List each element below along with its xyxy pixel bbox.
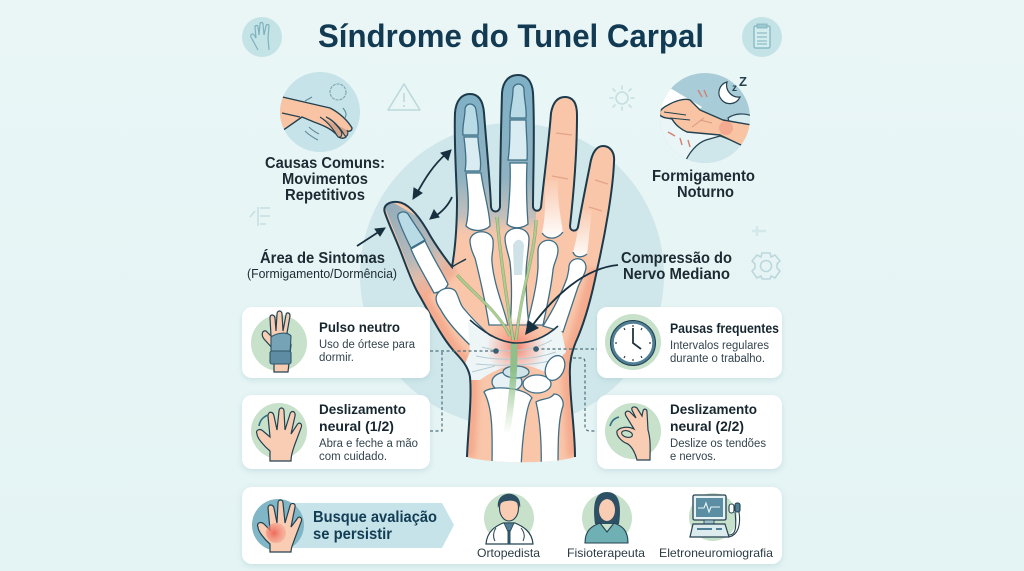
icon: hand badge [242,17,282,57]
icon: warning triangle [388,84,420,110]
text: night tingling label [652,168,755,201]
icon: faded arrows [752,226,766,236]
text: night tingling label: Noturno [677,184,734,201]
text: frequent breaks: Pausas frequentes [670,321,779,336]
icon: pinch hand [605,403,661,460]
text: neural glide 2: e nervos. [670,451,716,463]
icon: gear [752,253,780,279]
text: frequent breaks: durante o trabalho. [670,353,765,365]
icon: hand with pain [252,499,304,552]
icon: orthopedist [484,493,534,544]
nerve marker dots [493,346,539,354]
icon: sleeping hand with moon [660,73,750,163]
text: median nerve compression label: Nervo Mediano [623,266,730,283]
panel: neutral wrist [242,307,430,378]
text: neural glide 2 [670,402,766,463]
text: causes label: Movimentos [282,171,368,188]
text: neutral wrist: Uso de órtese para [319,339,416,351]
text: symptoms area label [247,250,397,281]
icon: sleep z letters: Z [739,74,747,89]
text: neural glide 2: neural (2/2) [670,419,744,434]
text: causes label [265,155,385,204]
text: median nerve compression label [621,250,732,283]
icon: sleep z letters [732,74,747,94]
text: seek evaluation: se persistir [313,526,392,543]
hand anatomy illustration [383,74,616,462]
icon: faded chart mark [250,207,270,226]
icon: sleep z letters: z [732,83,737,94]
text: neural glide 2: Deslize os tendões [670,438,766,450]
text: frequent breaks [670,321,779,365]
arrow: compression pointer [525,265,618,335]
text: seek evaluation: Busque avaliação [313,509,437,526]
text: orthopedist: Ortopedista [477,546,540,560]
panel: seek evaluation [242,487,782,564]
text: neutral wrist: Pulso neutro [319,320,400,335]
text: neural glide 1: Abra e feche a mão [319,438,418,450]
panel: neural glide 2 [597,395,782,469]
icon: clock [605,314,661,370]
text: causes label: Repetitivos [285,187,365,204]
icon: EMG machine [689,493,740,541]
text: symptoms area label: Área de Sintomas [260,250,385,267]
background circle behind hand [360,123,664,427]
median nerve branches [457,217,536,340]
icon: sun [610,86,634,110]
text: causes label: Causas Comuns: [265,155,385,172]
icon: clipboard badge [742,17,782,57]
panel: night tingling [652,73,755,201]
banner arrow [285,503,454,548]
text: frequent breaks: Intervalos regulares [670,340,769,352]
text: neural glide 1 [319,402,418,463]
icon: open hand [251,403,307,461]
text: EMG: Eletroneuromiografia [659,546,773,560]
text: seek evaluation [313,509,437,543]
text: neural glide 1: com cuidado. [319,451,387,463]
panel: neural glide 1 [242,395,430,469]
carpal ligament band [458,322,566,380]
text: neural glide 1: neural (1/2) [319,419,394,434]
text: neutral wrist [319,320,416,364]
text: symptoms area label: (Formigamento/Dormência) [247,267,397,281]
icon: wrist brace [251,311,307,372]
icon: physiotherapist [582,492,632,543]
finger and palm bones [398,84,592,356]
text: neutral wrist: dormir. [319,352,354,364]
text: physiotherapist: Fisioterapeuta [567,546,645,560]
title: Síndrome do Tunel Carpal [318,18,704,54]
icon: repetitive movement wrist [278,72,360,152]
text: median nerve compression label: Compressão do [621,250,732,267]
connector dashed lines [430,349,597,431]
panel: causes [265,72,385,204]
text: neural glide 2: Deslizamento [670,402,757,417]
text: night tingling label: Formigamento [652,168,755,185]
panel: frequent breaks [597,307,782,378]
arrows: movement and symptom pointers [357,150,452,246]
text: neural glide 1: Deslizamento [319,402,406,417]
